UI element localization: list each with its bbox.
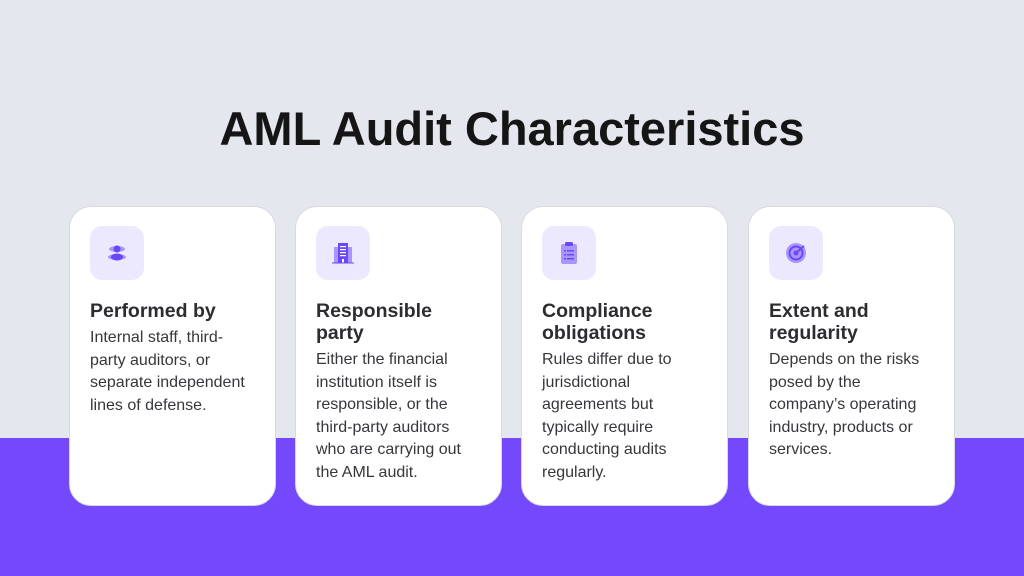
card: extent and regularity bbox=[748, 206, 955, 506]
heading: Performed by bbox=[90, 300, 216, 322]
heading bbox=[542, 300, 653, 344]
text: Depends on the risks posed by the company’s operating industry, products or services. bbox=[769, 351, 919, 458]
icon: radar bbox=[769, 226, 823, 280]
heading: regularity bbox=[769, 322, 858, 344]
icon: people bbox=[90, 226, 144, 280]
icon: clipboard bbox=[542, 226, 596, 280]
text: Either the financial institution itself is responsible, or the third-party auditors who are carrying out the AML audit. bbox=[316, 351, 461, 480]
title: AML Audit Characteristics bbox=[219, 102, 805, 155]
card: responsible party bbox=[295, 206, 502, 506]
text: Internal staff, third-party auditors, or separate independent lines of defense. bbox=[90, 329, 245, 414]
heading: Compliance bbox=[542, 300, 653, 322]
heading bbox=[316, 300, 432, 344]
card: performed by bbox=[69, 206, 276, 506]
text: Rules differ due to jurisdictional agreements but typically require conducting audits regularly. bbox=[542, 351, 672, 480]
heading: Responsible bbox=[316, 300, 432, 322]
heading: obligations bbox=[542, 322, 646, 344]
icon: building bbox=[316, 226, 370, 280]
purple band bbox=[0, 438, 1024, 576]
card: compliance obligations bbox=[521, 206, 728, 506]
heading: Extent and bbox=[769, 300, 869, 322]
heading: party bbox=[316, 322, 364, 344]
heading bbox=[769, 300, 869, 344]
